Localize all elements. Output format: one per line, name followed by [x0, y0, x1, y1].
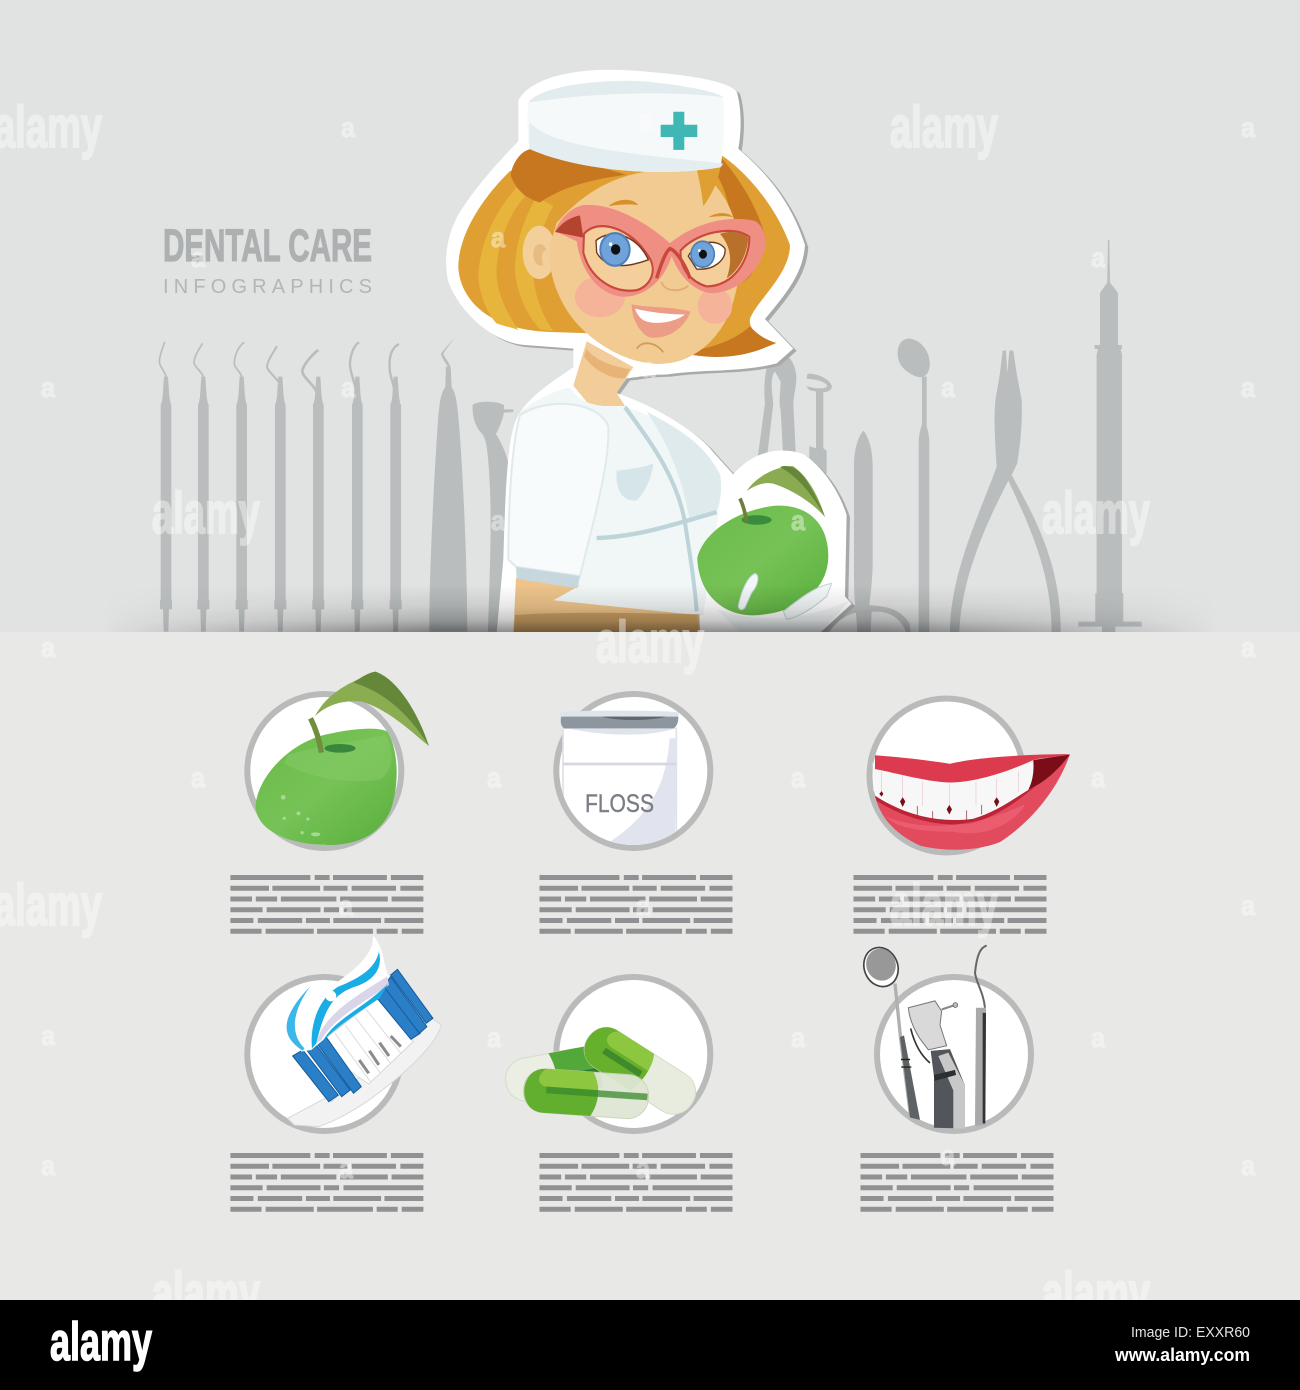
coat — [508, 387, 721, 633]
card: floss — [540, 694, 733, 934]
text placeholder bars — [230, 875, 423, 934]
explorer 6 — [350, 342, 363, 632]
circle — [247, 694, 401, 848]
forearm — [513, 578, 700, 633]
stock watermarks: a — [41, 1150, 55, 1181]
card: toothbrush — [230, 935, 441, 1212]
nose — [662, 282, 688, 290]
silhouettes: dental explorers and scaler — [159, 337, 513, 632]
hair — [458, 149, 790, 357]
coat right shade — [647, 412, 721, 522]
neck shadow — [584, 349, 630, 378]
icon: smile — [873, 754, 1070, 850]
extraction forceps — [757, 352, 796, 460]
stock watermarks: a — [791, 505, 805, 536]
upper background panel — [0, 0, 1300, 632]
card: dental tools — [858, 942, 1054, 1212]
stock watermarks: alamy — [596, 610, 704, 675]
scissors — [822, 431, 911, 632]
syringe — [1078, 240, 1142, 632]
card: smile — [854, 698, 1070, 934]
front capsule — [522, 1067, 650, 1120]
mouth — [632, 304, 691, 352]
right lens brown — [720, 232, 748, 278]
glove palm — [717, 600, 850, 633]
small apple with leaf — [697, 466, 850, 633]
gloved fingers — [738, 574, 832, 619]
cheeks — [575, 276, 732, 324]
text placeholder bars — [540, 875, 733, 934]
stock watermarks: a — [339, 1153, 353, 1184]
left lens — [583, 226, 653, 291]
stock watermarks: alamy — [1042, 481, 1150, 546]
card: capsules — [502, 977, 733, 1212]
stock watermarks: a — [941, 1140, 955, 1171]
circle — [877, 977, 1031, 1131]
stock watermarks: a — [1091, 762, 1105, 793]
silhouettes: forceps, elevator, scissors, mirror, pliers, syringe — [757, 240, 1142, 632]
icon: green capsules — [502, 1019, 704, 1122]
icon: green apple — [255, 672, 429, 845]
icon: floss packet — [560, 711, 679, 850]
hair yellow stripes — [478, 186, 553, 331]
heading: Dental Care: DENTAL CARE — [163, 220, 372, 271]
stock watermarks: alamy — [890, 95, 998, 160]
upper capsule — [576, 1019, 704, 1122]
title — [163, 220, 372, 298]
handpiece — [908, 1001, 965, 1128]
ultrasonic scaler — [429, 337, 467, 632]
orthodontic pliers — [950, 351, 1061, 632]
nurse cap — [527, 81, 724, 172]
nurse character sticker — [446, 70, 855, 635]
lower background panel — [0, 632, 1300, 1300]
hair dark fringe — [511, 149, 627, 202]
stock watermarks: a — [638, 105, 652, 136]
text placeholder bars — [854, 875, 1047, 934]
ear — [523, 226, 556, 279]
subheading: Infographics: INFOGRAPHICS — [163, 276, 372, 298]
back capsule — [502, 1045, 603, 1105]
stock watermarks: a — [636, 890, 650, 921]
pocket — [616, 463, 653, 501]
bridge — [657, 249, 690, 278]
neck — [573, 341, 633, 406]
coat body — [520, 387, 721, 615]
glasses frame — [555, 205, 765, 297]
stock watermarks: a — [636, 1153, 650, 1184]
stock watermarks: a — [41, 372, 55, 403]
stock watermarks: a — [487, 762, 501, 793]
right eye — [688, 241, 725, 269]
face — [550, 169, 739, 364]
cuff — [516, 567, 580, 588]
mirror — [858, 942, 920, 1120]
text placeholder bars — [860, 1153, 1054, 1212]
stock watermarks: a — [941, 372, 955, 403]
website: www.alamy.com — [1114, 1345, 1250, 1365]
probe — [975, 946, 987, 1126]
stock watermarks: a — [1241, 112, 1255, 143]
glasses arm — [555, 215, 583, 238]
stock watermarks: alamy — [890, 873, 998, 938]
sleeve — [508, 404, 608, 576]
explorer 7 — [390, 344, 402, 632]
circle — [247, 977, 401, 1131]
hair back — [458, 154, 790, 356]
circle — [556, 977, 710, 1131]
footer bar — [0, 1300, 1300, 1390]
text placeholder bars — [230, 1153, 423, 1212]
cap top shade — [528, 81, 723, 103]
small apple body — [697, 506, 828, 615]
elevator key — [806, 374, 832, 473]
forelock — [697, 155, 721, 206]
cap band shade — [529, 122, 723, 172]
stock watermarks: a — [1241, 890, 1255, 921]
white sticker outline — [446, 70, 852, 633]
cap cross — [661, 112, 697, 150]
right lens — [681, 231, 749, 286]
stock watermarks: a — [1241, 372, 1255, 403]
eyebrows — [608, 200, 733, 217]
shelf shadow — [128, 593, 1192, 632]
stock watermarks: alamy — [152, 1261, 260, 1326]
stock watermarks: a — [1091, 1022, 1105, 1053]
stock watermarks: a — [1241, 632, 1255, 663]
handpiece silhouette — [473, 402, 513, 632]
stock watermarks: a — [41, 1020, 55, 1051]
belt line — [597, 512, 717, 538]
stock watermarks: a — [491, 222, 505, 253]
circle — [556, 694, 710, 848]
explorer 1 — [159, 342, 172, 632]
stock watermarks: a — [641, 352, 655, 383]
stock watermarks: alamy — [1042, 1261, 1150, 1326]
stock watermarks: a — [341, 112, 355, 143]
waist belt brown — [514, 613, 700, 633]
hair dark right — [683, 156, 775, 357]
glasses — [555, 205, 765, 297]
stock watermarks: a — [191, 242, 205, 273]
explorer 3 — [234, 342, 248, 632]
stock watermarks: a — [791, 762, 805, 793]
explorer 5 — [302, 350, 324, 632]
explorer 2 — [194, 343, 209, 632]
stock watermarks: a — [487, 1022, 501, 1053]
stock watermarks: alamy — [152, 481, 260, 546]
left eye — [596, 233, 648, 266]
seam — [625, 407, 697, 611]
stock watermarks: a — [339, 890, 353, 921]
icon: toothbrush with paste — [287, 935, 441, 1127]
stock watermarks: a — [191, 762, 205, 793]
explorer 4 — [267, 346, 286, 632]
stock watermarks: a — [491, 505, 505, 536]
stock watermarks: a — [1091, 242, 1105, 273]
dental mirror — [898, 339, 930, 632]
label: floss: FLOSS — [585, 790, 654, 818]
text placeholder bars — [540, 1153, 733, 1212]
circle — [870, 698, 1024, 852]
footer logo: alamy — [50, 1312, 152, 1372]
small apple stem — [740, 498, 747, 522]
sticker shadow — [449, 72, 855, 635]
stock watermarks: a — [1241, 1150, 1255, 1181]
card: apple — [230, 672, 429, 934]
stock watermarks: a — [791, 1022, 805, 1053]
image id: Image ID: EXXR60 — [1131, 1324, 1250, 1341]
icon: dental tools — [858, 942, 987, 1128]
stock watermarks: a — [341, 372, 355, 403]
stock watermarks: a — [41, 632, 55, 663]
small apple leaf — [747, 466, 825, 517]
